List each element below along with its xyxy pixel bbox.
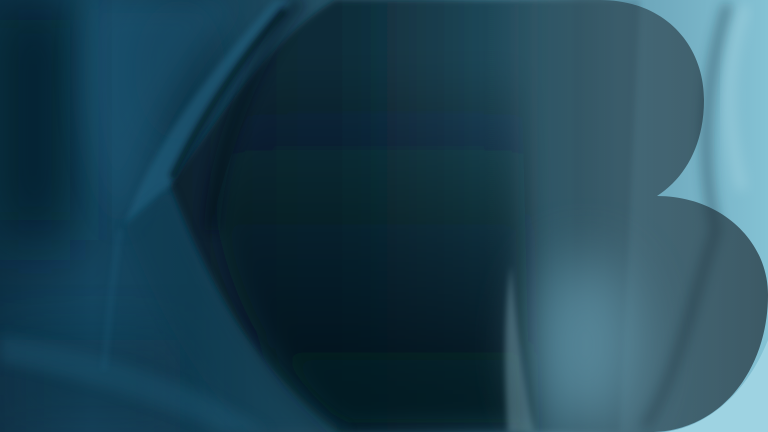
bottom right light area [665, 340, 768, 432]
decorative B shape overlay [300, 0, 768, 432]
